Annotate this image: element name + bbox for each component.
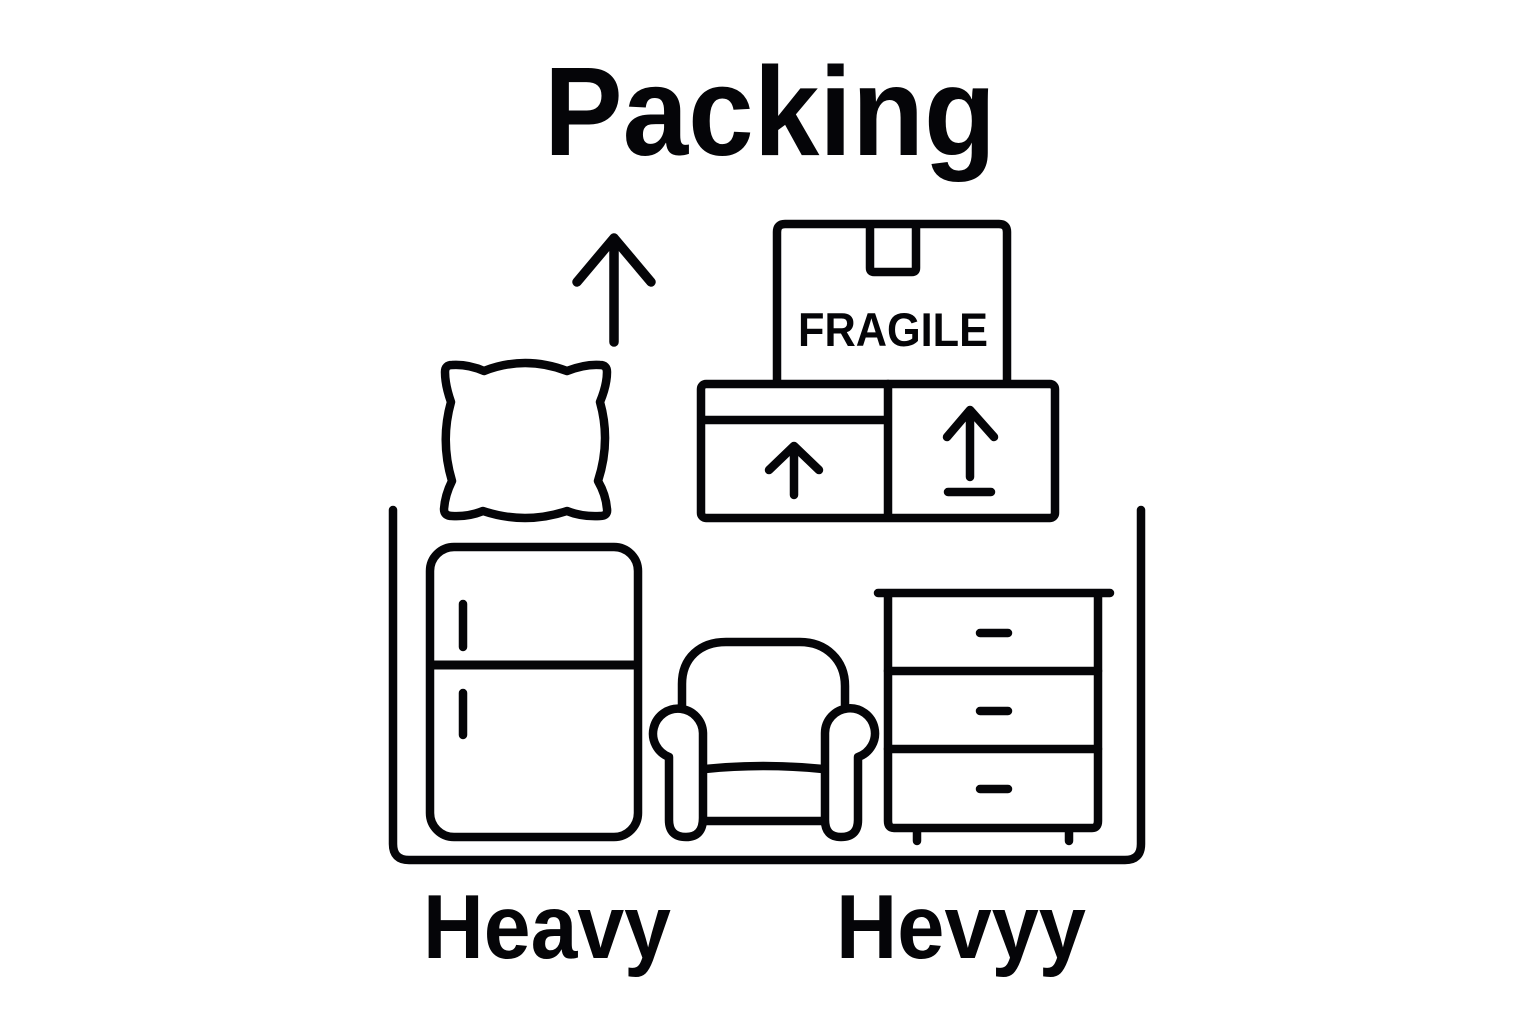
icon: lower boxes	[701, 384, 1055, 518]
icon: pillow	[444, 363, 607, 518]
container: truck bed	[393, 510, 1141, 860]
icon: fragile box	[777, 224, 1007, 381]
fragile label: FRAGILE	[798, 303, 988, 356]
title: Packing	[544, 41, 996, 182]
icon: dresser	[878, 593, 1110, 841]
label: heavy right: Hevyy	[836, 877, 1086, 978]
label: heavy left: Heavy	[423, 877, 671, 978]
arrow: up	[577, 238, 651, 342]
icon: armchair	[653, 642, 875, 837]
icon: refrigerator	[430, 547, 638, 837]
